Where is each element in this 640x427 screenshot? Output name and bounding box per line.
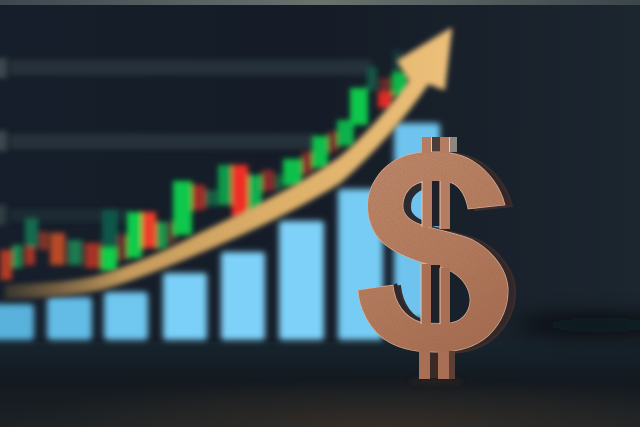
bar highlights xyxy=(420,137,450,324)
dollar sign object xyxy=(358,137,515,379)
top edge strip xyxy=(0,0,640,5)
candlestick chart xyxy=(0,50,408,280)
lower bars xyxy=(419,264,455,379)
upper counter dark inner wall xyxy=(403,182,422,225)
floor reflection under dollar sign xyxy=(408,378,464,384)
rising gold arrow xyxy=(6,29,451,298)
upper stub xyxy=(422,137,457,152)
copper front face xyxy=(358,152,508,352)
blue bar chart xyxy=(0,123,440,340)
lower counter dark inner wall xyxy=(393,283,420,322)
extruded dark side of dollar sign xyxy=(365,153,515,353)
floor shadow at right xyxy=(515,316,640,334)
horizontal chart grid bands xyxy=(0,58,372,225)
floor xyxy=(0,342,640,427)
lower stub xyxy=(419,350,455,378)
upper bars xyxy=(422,137,457,229)
warm floor glow xyxy=(0,345,640,427)
